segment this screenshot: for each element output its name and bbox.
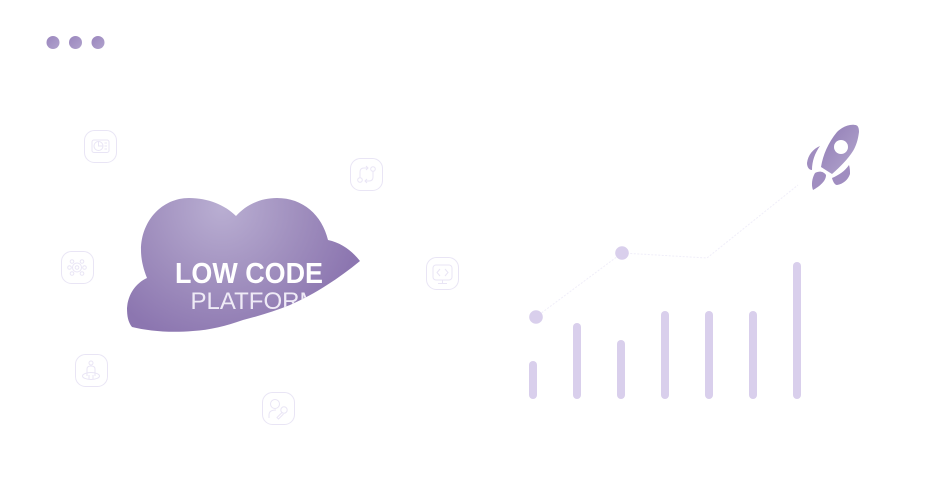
heading: low code: LOW CODE [175, 258, 323, 290]
trend line [536, 185, 798, 317]
icon: network gear [62, 252, 94, 284]
icon: swap arrows [350, 158, 382, 190]
icon: rocket [807, 125, 859, 190]
icon: code monitor [426, 258, 458, 290]
subheading: platform: PLATFORM [190, 288, 320, 315]
cloud shape [127, 198, 360, 332]
bar chart [529, 262, 801, 399]
window dots [46, 36, 104, 49]
trend point 2 [615, 246, 629, 260]
icon: person on platform [76, 354, 108, 386]
cloud with label [127, 198, 360, 332]
icon: dashboard chart [84, 130, 116, 162]
icon: user with key [262, 392, 294, 424]
trend point 1 [529, 310, 543, 324]
